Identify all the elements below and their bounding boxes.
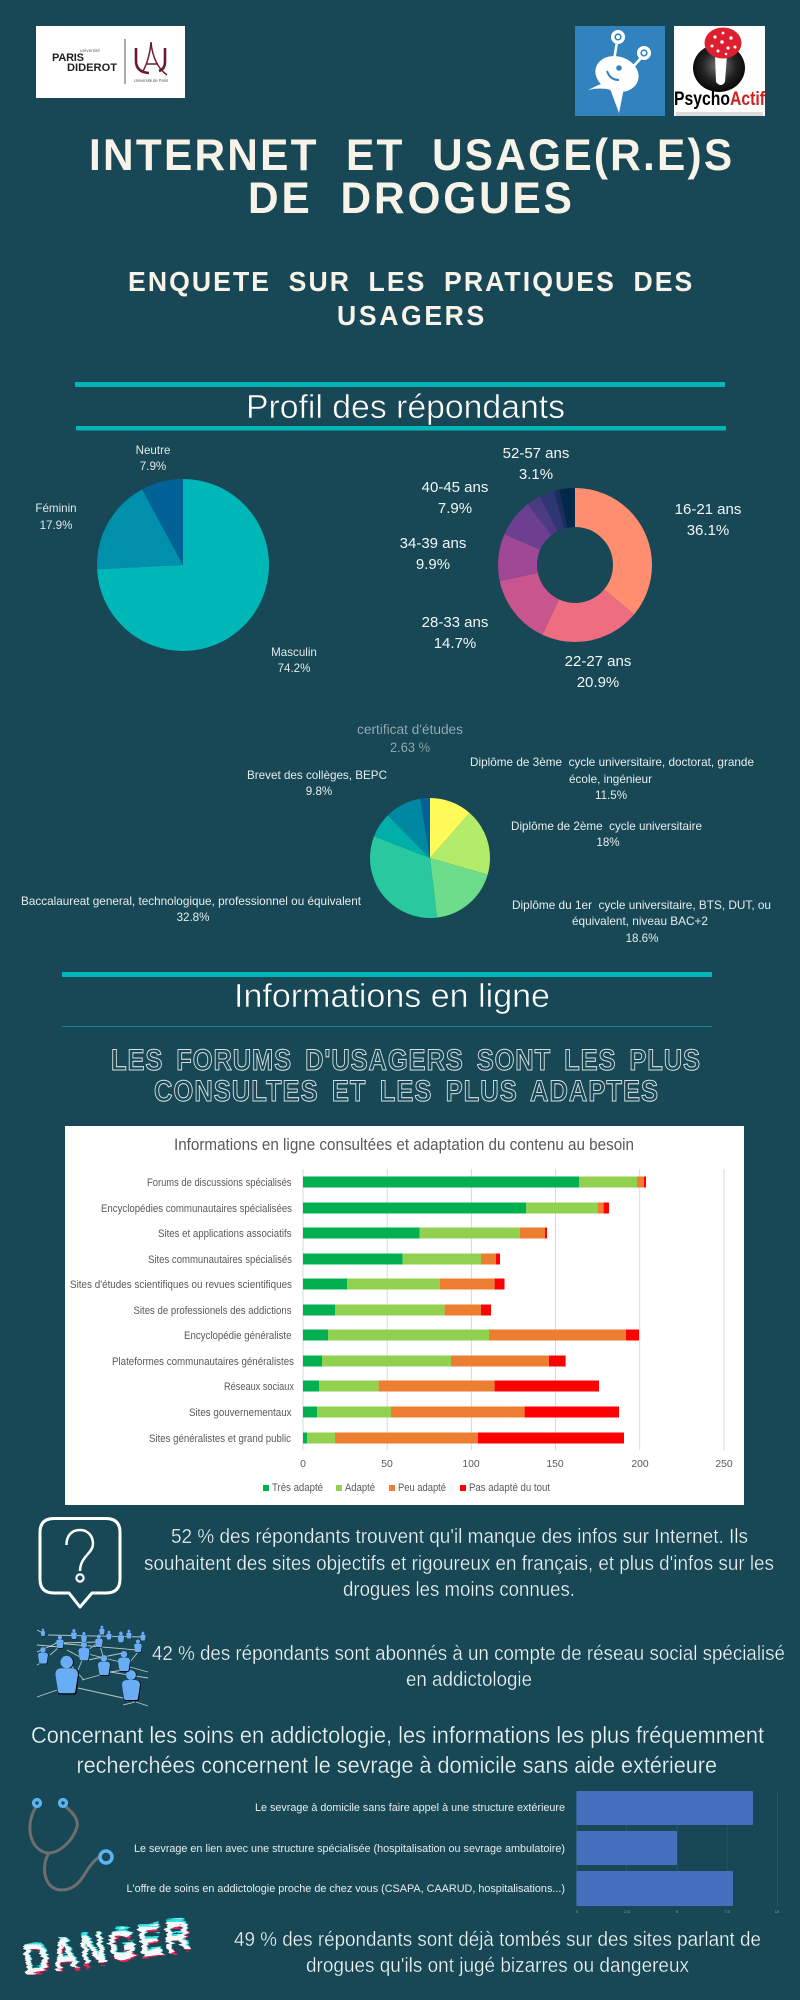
icon: danger glitch word: DANGER (21, 1913, 195, 1987)
subtitle: ENQUETE SUR LES PRATIQUES DES (128, 265, 692, 297)
logo: PsychoActif (674, 26, 766, 116)
labels: genre: 74.2% (278, 662, 310, 675)
section heading: informations en ligne: Informations en ligne (234, 977, 550, 1014)
legend: Très adapté (272, 1482, 323, 1494)
logo: PsychoActif: PsychoActif (674, 89, 766, 110)
section heading: informations en ligne (62, 972, 712, 1027)
labels: diplômes: école, ingénieur (569, 773, 652, 786)
category labels: Encyclopédies communautaires spécialisées (101, 1203, 292, 1215)
axis values: 250 (715, 1459, 733, 1470)
bars (303, 1176, 646, 1444)
icon: danger glitch word: DANGER (21, 1909, 194, 1983)
title (89, 131, 732, 223)
legend: Pas adapté du tout (469, 1482, 550, 1494)
labels: âge: 16-21 ans (675, 501, 741, 518)
bars (576, 1791, 753, 1906)
text: 49 %: 49 % des répondants sont déjà tombés sur des sites parlant de (234, 1929, 761, 1951)
labels: diplômes: 2.63 % (390, 740, 430, 755)
labels: diplômes: Baccalaureat general, technologique, professionnel ou équivalent (21, 895, 362, 908)
labels: genre: 7.9% (140, 460, 166, 473)
category labels: Sites gouvernementaux (189, 1407, 292, 1419)
axis values: 10 (775, 1909, 780, 1914)
text: 49 % (234, 1929, 761, 1977)
axis values (300, 1459, 733, 1470)
logo: blue creature (575, 26, 665, 116)
logo: Université Paris Diderot: PARIS (52, 52, 84, 64)
labels: genre: Neutre (136, 444, 170, 457)
subtitle: USAGERS (337, 299, 484, 331)
labels: âge: 34-39 ans (400, 535, 466, 552)
labels: genre: Masculin (271, 646, 317, 659)
category labels: Sites et applications associatifs (158, 1228, 292, 1240)
category labels: Sites communautaires spécialisés (148, 1254, 292, 1266)
labels: âge: 20.9% (577, 674, 619, 691)
labels: genre (35, 444, 317, 675)
category labels: L'offre de soins en addictologie proche de chez vous (CSAPA, CAARUD, hospitalisations...) (126, 1883, 565, 1895)
labels: âge: 3.1% (519, 466, 553, 483)
labels: diplômes: certificat d'études (357, 722, 463, 737)
bar chart: soins (126, 1791, 780, 1914)
axis values (576, 1909, 780, 1914)
grid (576, 1791, 778, 1906)
legend (263, 1482, 550, 1494)
axis values: 2.5 (624, 1909, 631, 1914)
category labels (126, 1802, 565, 1895)
category labels: Encyclopédie généraliste (184, 1330, 292, 1342)
heading: soins en addictologie: recherchées concernent le sevrage à domicile sans aide extérieure (76, 1752, 717, 1778)
legend: Adapté (345, 1482, 375, 1494)
labels: âge: 52-57 ans (503, 445, 569, 462)
labels: âge: 9.9% (416, 556, 450, 573)
labels: diplômes: Diplôme de 3ème cycle universitaire, doctorat, grande (470, 756, 754, 769)
category labels: Le sevrage à domicile sans faire appel à une structure extérieure (255, 1802, 565, 1814)
panel: stacked bar chart (65, 1126, 744, 1505)
subtitle (128, 265, 692, 331)
labels: âge: 22-27 ans (565, 653, 631, 670)
labels: diplômes: Brevet des collèges, BEPC (247, 769, 387, 782)
text: 52 %: drogues les moins connues. (343, 1579, 575, 1601)
labels: diplômes (21, 722, 771, 945)
text: 52 %: 52 % des répondants trouvent qu'il manque des infos sur Internet. Ils (171, 1526, 748, 1548)
labels: âge: 40-45 ans (422, 479, 488, 496)
outlined heading: forums: LES FORUMS D'USAGERS SONT LES PLUS (111, 1043, 700, 1076)
pie chart: diplômes (400, 828, 460, 888)
title: INTERNET ET USAGE(R.E)S (89, 131, 732, 180)
category labels: Plateformes communautaires généralistes (112, 1356, 294, 1368)
text: 52 % (144, 1526, 774, 1601)
labels: âge (400, 445, 741, 691)
donut chart: âge (518, 508, 632, 622)
category labels: Le sevrage en lien avec une structure spécialisée (hospitalisation ou sevrage ambulatoire) (134, 1843, 565, 1855)
chart title: Informations en ligne consultées et adaptation du contenu au besoin (174, 1136, 634, 1154)
labels: diplômes: 18% (596, 836, 620, 849)
labels: âge: 14.7% (434, 635, 476, 652)
category labels: Réseaux sociaux (224, 1381, 294, 1393)
labels: diplômes: 11.5% (595, 789, 627, 802)
heading: soins en addictologie (31, 1722, 765, 1778)
outlined heading: forums: CONSULTES ET LES PLUS ADAPTES (154, 1074, 658, 1107)
category labels: Forums de discussions spécialisés (147, 1177, 292, 1189)
text: 42 % (152, 1643, 785, 1691)
axis values: 0 (300, 1459, 306, 1470)
labels: âge: 36.1% (687, 522, 729, 539)
text: 42 %: en addictologie (406, 1669, 532, 1691)
grid (303, 1169, 724, 1450)
category labels: Sites généralistes et grand public (149, 1433, 291, 1445)
icon: question bubble (40, 1518, 120, 1607)
section heading: profil des répondants: Profil des répondants (246, 388, 565, 425)
category labels: Sites de professionels des addictions (134, 1305, 292, 1317)
logo: Université Paris Diderot (36, 26, 185, 98)
labels: diplômes: équivalent, niveau BAC+2 (572, 915, 708, 928)
section heading: profil des répondants (75, 382, 726, 430)
text: 49 %: drogues qu'ils ont jugé bizarres ou dangereux (306, 1955, 689, 1977)
icon: stethoscope (30, 1800, 112, 1890)
labels: diplômes: 18.6% (626, 932, 658, 945)
labels: genre: 17.9% (40, 519, 72, 532)
labels: diplômes: 9.8% (306, 785, 332, 798)
icon: danger glitch word: DANGER (20, 1911, 194, 1985)
labels: genre: Féminin (35, 502, 77, 515)
axis values: 100 (462, 1459, 480, 1470)
labels: âge: 28-33 ans (422, 614, 488, 631)
pie chart: genre (140, 522, 226, 608)
axis values: 7.5 (724, 1909, 731, 1914)
text: 52 %: souhaitent des sites objectifs et rigoureux en français, et plus d'infos sur les (144, 1553, 774, 1575)
labels: diplômes: Diplôme du 1er cycle universitaire, BTS, DUT, ou (512, 899, 771, 912)
legend: Peu adapté (398, 1482, 446, 1494)
outlined heading: forums (111, 1043, 700, 1107)
labels: âge: 7.9% (438, 500, 472, 517)
title: DE DROGUES (248, 174, 572, 223)
labels: diplômes: Diplôme de 2ème cycle universitaire (511, 820, 702, 833)
heading: soins en addictologie: Concernant les soins en addictologie, les informations les plus fréquemment (31, 1722, 765, 1748)
axis values: 200 (631, 1459, 649, 1470)
category labels (70, 1177, 294, 1445)
axis values: 5 (676, 1909, 679, 1914)
logo: Université Paris Diderot: DIDEROT (67, 62, 117, 74)
logo: Université Paris Diderot: université (80, 48, 101, 53)
axis values: 0 (576, 1909, 579, 1914)
axis values: 150 (546, 1459, 564, 1470)
icon: social network (37, 1626, 148, 1706)
labels: diplômes: 32.8% (177, 911, 209, 924)
axis values: 50 (381, 1459, 393, 1470)
logo: Université Paris Diderot: Université de Paris (134, 78, 169, 83)
category labels: Sites d'études scientifiques ou revues scientifiques (70, 1279, 292, 1291)
